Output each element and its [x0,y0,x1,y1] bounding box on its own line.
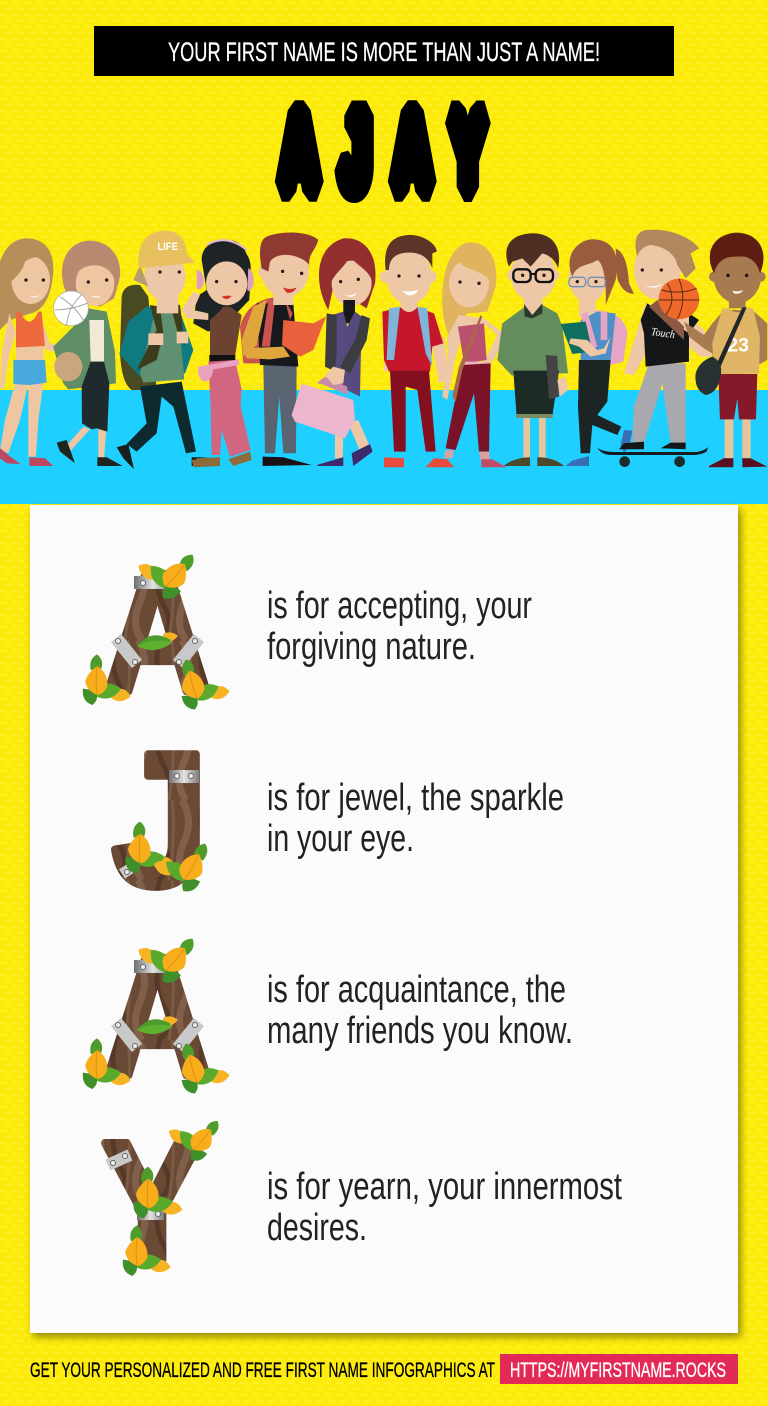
text: J meaning [267,777,564,860]
person 2: girl with volleyball [53,241,123,466]
person 5: boy with book [240,233,326,466]
icon: wooden letter A: A [104,538,211,728]
text: Y meaning: desires. [267,1207,367,1249]
person 3: hiker with cap and backpack [117,231,220,469]
text: J meaning: is for jewel, the sparkle [267,777,564,819]
cyan floor band [0,390,768,504]
person 12: boy in yellow tank with bag [684,233,767,467]
icon: wooden letter J: J [112,714,208,926]
footer url badge [500,1354,738,1384]
text: J meaning: in your eye. [267,818,414,860]
banner: tagline [94,26,674,76]
footer text: GET YOUR PERSONALIZED AND FREE FIRST NAME INFOGRAPHICS AT [30,1359,495,1382]
person 12: boy in yellow tank with bag: 23 [727,336,749,357]
text: A meaning: is for accepting, your [267,585,532,627]
icon: wooden letter Y: Y [102,1107,202,1297]
text: second A meaning [267,969,573,1052]
person 7: boy in red t-shirt [380,235,454,467]
person 10: girl with ponytail and tablet [561,239,634,466]
person 11: skateboarder with basketball: Touch [650,326,676,341]
person 9: boy with glasses and folder [497,233,568,466]
icon: wooden letter A, second: A [104,922,211,1112]
person 11: skateboarder with basketball [597,230,712,467]
person 1: girl in orange top [0,238,80,466]
illustration: group of twelve young people [0,230,767,469]
person 3: hiker with cap and backpack: LIFE [157,241,178,253]
person 8: blonde girl [442,242,507,467]
text: second A meaning: is for acquaintance, the [267,969,566,1011]
text: A meaning [267,585,532,668]
person 6: girl with pink bag [292,238,376,466]
person 4: girl with headphones [182,240,254,466]
text: second A meaning: many friends you know. [267,1010,573,1052]
text: Y meaning [267,1166,622,1249]
text: A meaning: forgiving nature. [267,626,476,668]
panel: letter meanings [30,505,738,1333]
title: name: AJAY [280,95,485,210]
text: Y meaning: is for yearn, your innermost [267,1166,622,1208]
